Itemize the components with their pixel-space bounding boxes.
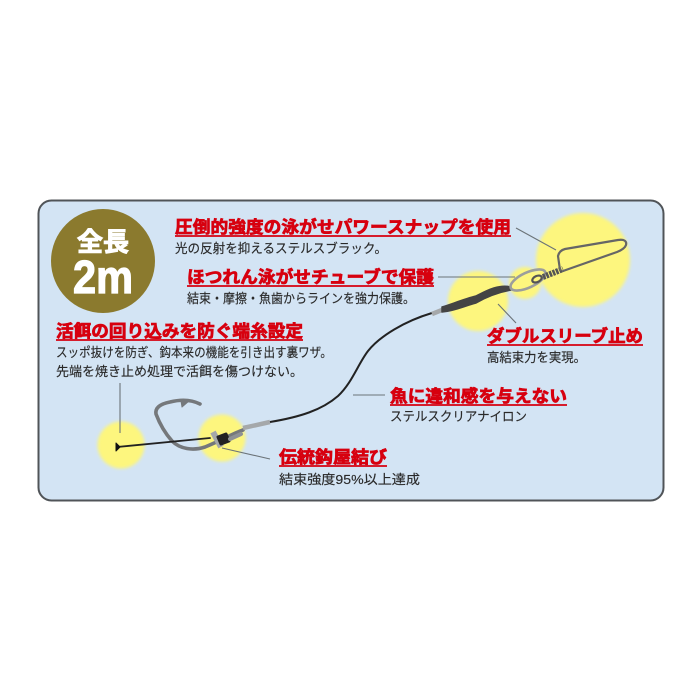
- callout: knot: [279, 448, 420, 487]
- highlights: yellow glow circles: [98, 213, 630, 468]
- callout: power snap: 圧倒的強度の泳がせパワースナップを使用: [175, 217, 511, 237]
- callout: tag end: 活餌の回り込みを防ぐ端糸設定: [56, 321, 303, 341]
- snap swivel: [531, 240, 626, 284]
- hook: [156, 400, 243, 449]
- callout: tube: [187, 267, 434, 306]
- double sleeve: [432, 286, 511, 314]
- badge: total length: 2m: [73, 251, 133, 303]
- callout: knot: 結束強度95%以上達成: [279, 472, 420, 487]
- callout: knot: 伝統鈎屋結び: [279, 448, 387, 467]
- callout: double sleeve: [487, 326, 643, 365]
- tube loop: [508, 265, 548, 295]
- callout: nylon: ステルスクリアナイロン: [390, 409, 527, 424]
- callout: tag end: 先端を焼き止め処理で活餌を傷つけない。: [56, 364, 303, 379]
- callout: double sleeve: 高結束力を実現。: [487, 350, 586, 365]
- callout: power snap: 光の反射を抑えるステルスブラック。: [175, 241, 387, 256]
- callout: nylon: [390, 386, 567, 424]
- callout: nylon: 魚に違和感を与えない: [390, 386, 567, 406]
- clear nylon line: [270, 313, 432, 422]
- rig illustration: [116, 240, 626, 451]
- callout: tag end: [56, 321, 332, 379]
- callout: tube: ほつれん泳がせチューブで保護: [187, 267, 434, 287]
- hook knot: [213, 422, 270, 447]
- panel: background: [38, 200, 664, 500]
- badge: total length: [51, 209, 155, 313]
- callout: tag end: スッポ抜けを防ぎ、鈎本来の機能を引き出す裏ワザ。: [56, 345, 332, 360]
- tag end line: [116, 438, 210, 451]
- callout: double sleeve: ダブルスリーブ止め: [487, 326, 643, 346]
- callout: tube: 結束・摩擦・魚歯からラインを強力保護。: [187, 291, 415, 306]
- leader lines: [120, 228, 556, 459]
- callout: power snap: [175, 217, 511, 256]
- badge: total length: 全長: [77, 227, 129, 257]
